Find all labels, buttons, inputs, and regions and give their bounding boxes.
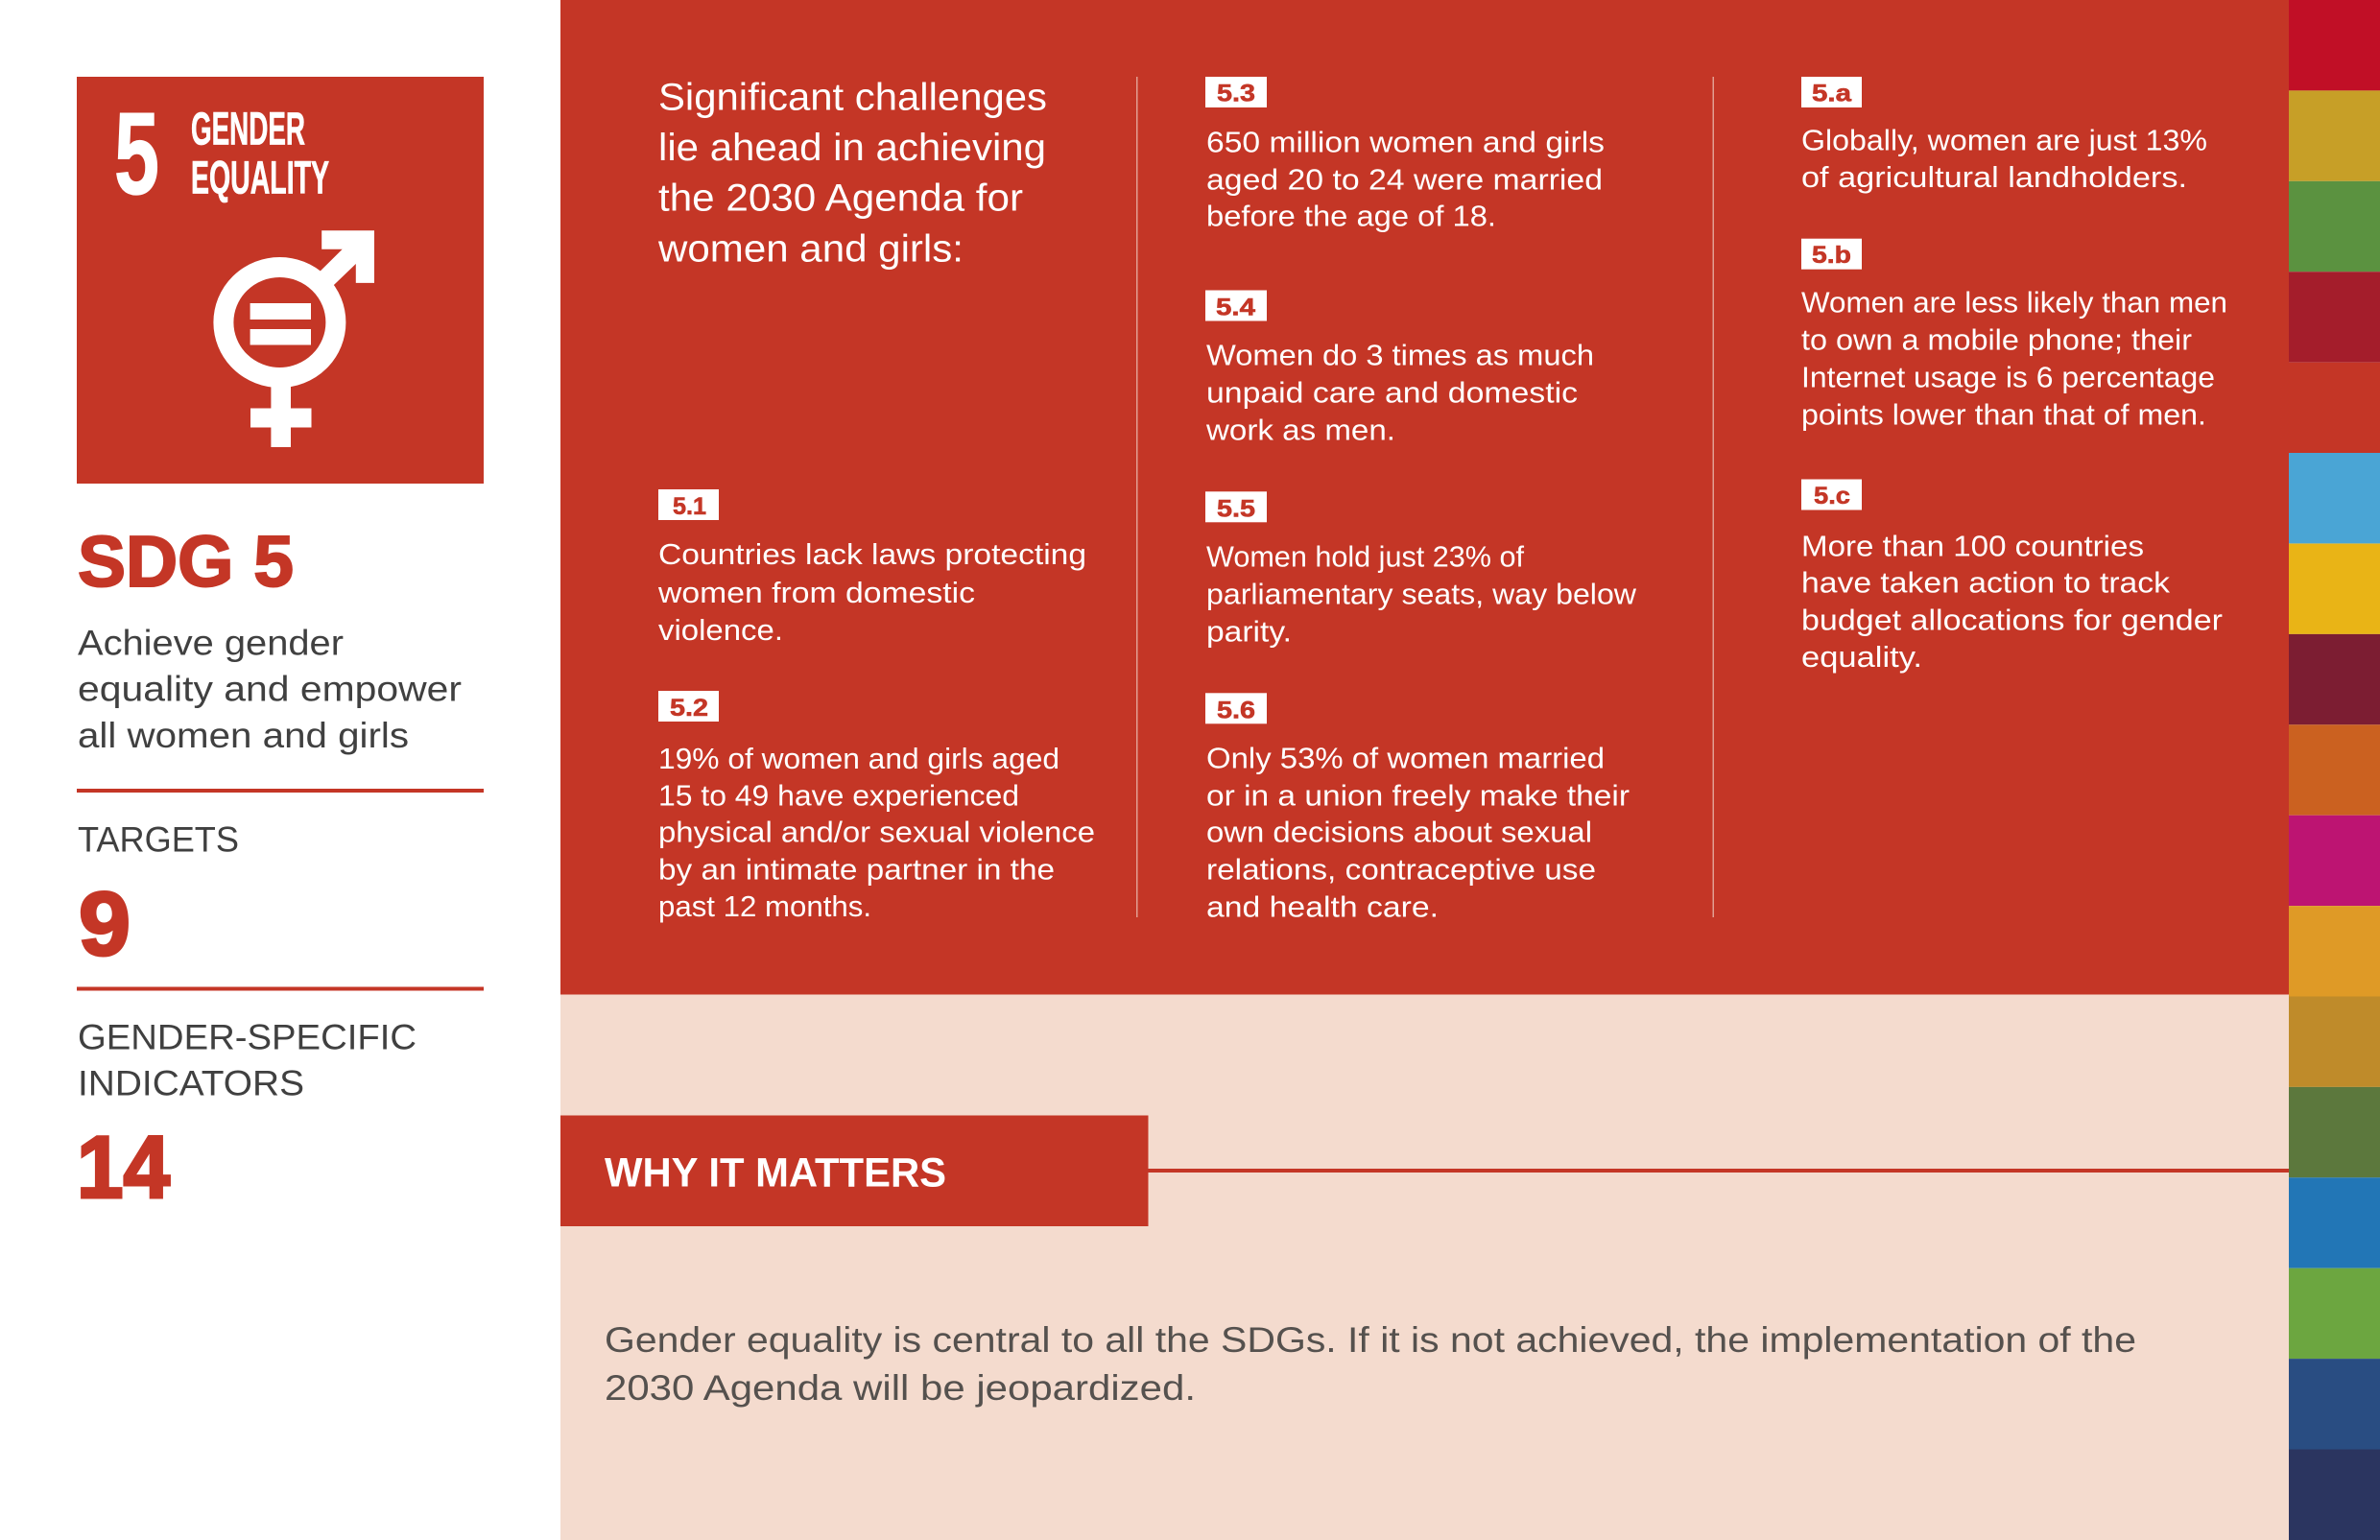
target 5.4 xyxy=(1205,290,1594,446)
target 5.3: 650 million women and girls xyxy=(1206,126,1605,158)
target 5.5 xyxy=(1205,491,1637,648)
icon: SDG 5 gender equality tile: 5 xyxy=(114,88,159,219)
target 5.a xyxy=(1801,77,2207,194)
text block: goal statement: all women and girls xyxy=(78,715,409,755)
target 5.6: relations, contraceptive use xyxy=(1206,854,1596,887)
text block: intro xyxy=(657,77,1047,271)
target 5.1: women from domestic xyxy=(657,577,975,609)
target 5.c: budget allocations for gender xyxy=(1801,604,2223,637)
icon: combined gender symbol with equals sign xyxy=(224,230,374,447)
target 5.b xyxy=(1801,239,2227,431)
heading: SDG 5: SDG 5 xyxy=(78,521,294,602)
text block: why it matters body: 2030 Agenda will be jeopardized. xyxy=(605,1367,1196,1408)
target 5.c xyxy=(1801,480,2223,674)
target 5.2: 19% of women and girls aged xyxy=(658,743,1059,775)
text block: goal statement: Achieve gender xyxy=(78,622,344,662)
target 5.6: and health care. xyxy=(1206,890,1439,923)
label: gender-specific indicators xyxy=(78,1017,416,1103)
text block: why it matters body xyxy=(605,1319,2136,1408)
target 5.6 xyxy=(1205,693,1630,923)
colour strip: 17 SDG colours xyxy=(2289,0,2380,1540)
target 5.6: or in a union freely make their xyxy=(1206,779,1630,812)
label: targets: TARGETS xyxy=(78,819,239,860)
target 5.6: 5.6 xyxy=(1217,697,1255,723)
target 5.4: 5.4 xyxy=(1216,294,1255,320)
target 5.2 xyxy=(658,691,1095,923)
icon: SDG 5 gender equality tile xyxy=(77,77,484,484)
panel: red challenges panel xyxy=(560,0,2289,994)
target 5.5: parity. xyxy=(1206,615,1292,648)
text block: intro: the 2030 Agenda for xyxy=(658,177,1023,219)
label: gender-specific indicators: INDICATORS xyxy=(78,1063,304,1103)
target 5.2: past 12 months. xyxy=(658,890,871,923)
target 5.4: Women do 3 times as much xyxy=(1206,340,1594,372)
target 5.6: own decisions about sexual xyxy=(1206,817,1592,849)
text block: intro: Significant challenges xyxy=(658,77,1047,119)
panel: left sidebar xyxy=(77,77,484,1217)
target 5.1: violence. xyxy=(658,614,783,647)
target 5.4: work as men. xyxy=(1205,414,1395,446)
target 5.3: 5.3 xyxy=(1217,81,1255,107)
target 5.c: equality. xyxy=(1801,641,1922,674)
target 5.3: before the age of 18. xyxy=(1206,201,1496,233)
target 5.3: aged 20 to 24 were married xyxy=(1206,163,1603,196)
target 5.3 xyxy=(1205,77,1605,233)
text block: intro: women and girls: xyxy=(657,228,964,271)
target 5.5: parliamentary seats, way below xyxy=(1206,578,1637,610)
text block: goal statement xyxy=(78,622,462,755)
target 5.a: of agricultural landholders. xyxy=(1801,161,2187,194)
target 5.5: 5.5 xyxy=(1217,495,1255,522)
target 5.2: 5.2 xyxy=(670,695,708,722)
target 5.5: Women hold just 23% of xyxy=(1206,541,1525,574)
target 5.1: Countries lack laws protecting xyxy=(658,538,1086,571)
target 5.b: points lower than that of men. xyxy=(1801,398,2206,431)
target 5.b: Internet usage is 6 percentage xyxy=(1801,361,2215,393)
target 5.4: unpaid care and domestic xyxy=(1206,376,1578,409)
text block: goal statement: equality and empower xyxy=(78,668,462,708)
icon: SDG 5 gender equality tile: EQUALITY xyxy=(191,154,329,203)
target 5.6: Only 53% of women married xyxy=(1206,743,1605,775)
target 5.1 xyxy=(657,489,1086,647)
target 5.c: have taken action to track xyxy=(1801,567,2171,600)
target 5.b: to own a mobile phone; their xyxy=(1801,323,2192,356)
target 5.c: More than 100 countries xyxy=(1801,530,2144,562)
heading: why it matters banner: WHY IT MATTERS xyxy=(605,1150,946,1196)
target 5.a: Globally, women are just 13% xyxy=(1801,125,2207,157)
target 5.2: physical and/or sexual violence xyxy=(658,816,1095,848)
icon: SDG 5 gender equality tile: GENDER xyxy=(191,104,305,155)
target 5.2: by an intimate partner in the xyxy=(658,854,1055,887)
number: 14 indicators: 14 xyxy=(77,1119,170,1217)
heading: why it matters banner xyxy=(560,1115,1148,1226)
target 5.b: Women are less likely than men xyxy=(1801,287,2227,320)
panel: why it matters xyxy=(560,994,2289,1540)
text block: why it matters body: Gender equality is central to all the SDGs. If it is not achieved, the implementation of the xyxy=(605,1319,2136,1360)
label: gender-specific indicators: GENDER-SPECIFIC xyxy=(78,1017,416,1057)
text block: intro: lie ahead in achieving xyxy=(658,127,1046,169)
target 5.a: 5.a xyxy=(1812,81,1852,107)
number: 9 targets: 9 xyxy=(79,873,131,974)
target 5.c: 5.c xyxy=(1814,483,1850,509)
target 5.b: 5.b xyxy=(1812,242,1851,269)
target 5.2: 15 to 49 have experienced xyxy=(658,779,1019,812)
target 5.1: 5.1 xyxy=(673,493,706,520)
